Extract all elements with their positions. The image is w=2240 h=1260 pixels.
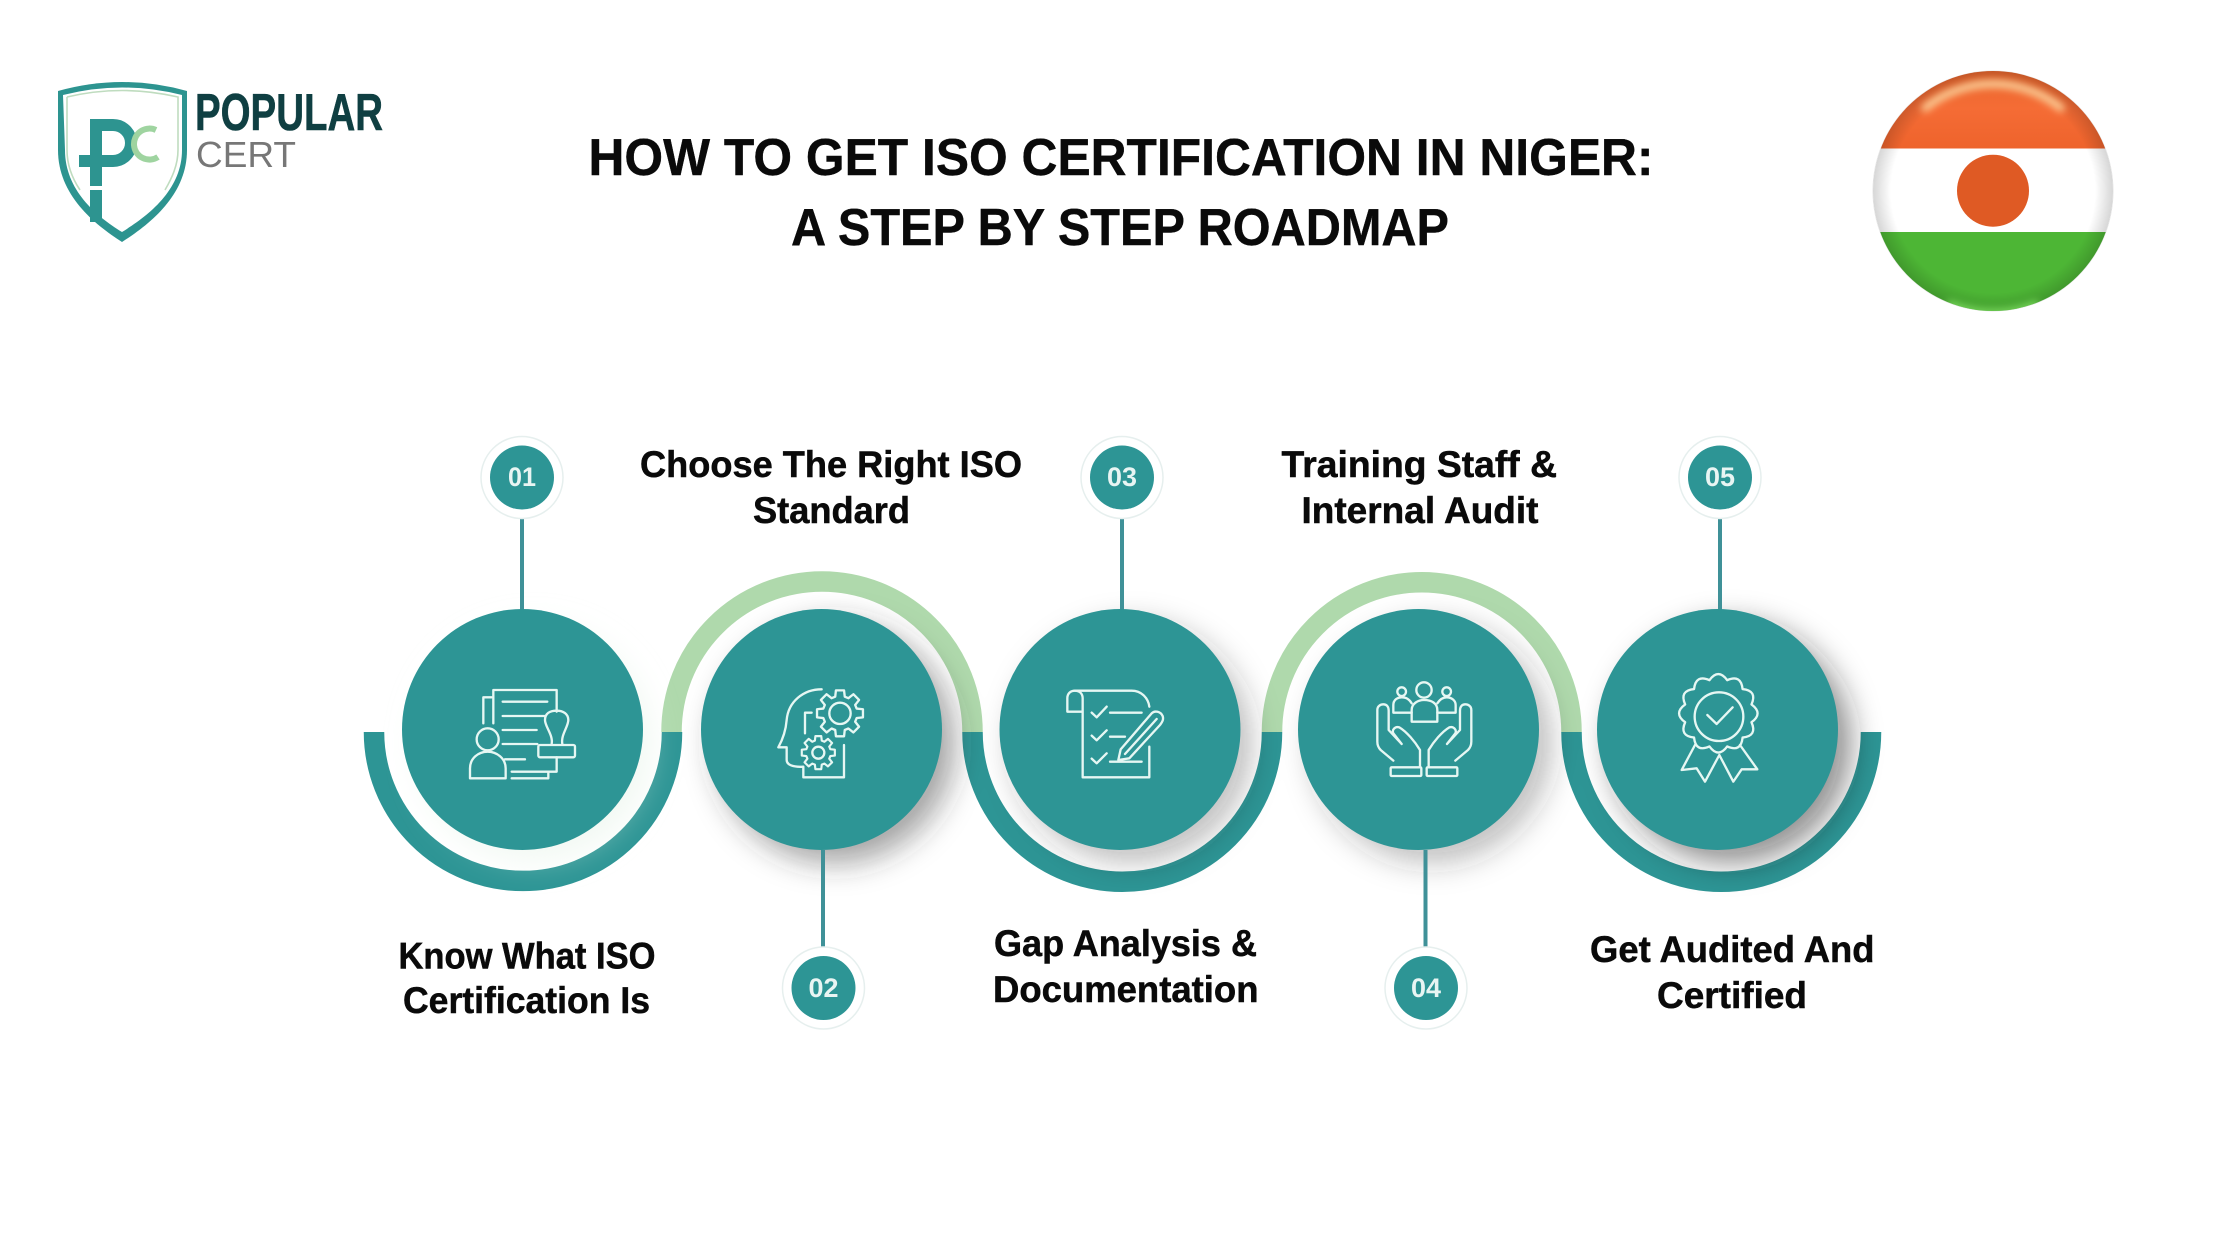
badge 05 (1679, 436, 1761, 518)
label: step 1: Certification Is (403, 980, 650, 1021)
label: step 3: Documentation (993, 969, 1258, 1010)
icon: award rosette (1679, 674, 1758, 782)
label: step 2 (640, 444, 1022, 531)
step 3 circle (1000, 609, 1240, 850)
label: step 2: Standard (753, 490, 910, 531)
label: step 5: Get Audited And (1590, 929, 1874, 970)
step 1 circle (402, 609, 643, 850)
icon: Niger flag badge (1870, 68, 2116, 314)
label: step 2: Choose The Right ISO (640, 444, 1022, 485)
step 4 circle (1298, 609, 1539, 850)
circle shadows (416, 623, 1851, 863)
arc: step 2 (672, 582, 972, 732)
label: step 5 (1590, 929, 1874, 1016)
icon: checklist and pencil (1067, 691, 1163, 777)
label: step 3: Gap Analysis & (994, 923, 1257, 964)
title: HOW TO GET ISO CERTIFICATION IN NIGER: (588, 129, 1654, 187)
logo wordmark: POPULAR (195, 84, 383, 142)
badge 01: 01 (508, 462, 536, 492)
arc: step 4 (1272, 582, 1572, 732)
label: step 4: Internal Audit (1302, 490, 1538, 531)
label: step 1 (398, 936, 656, 1021)
logo wordmark: CERT (196, 134, 296, 175)
title: A STEP BY STEP ROADMAP (791, 199, 1449, 257)
arc: step 3 (972, 732, 1272, 882)
logo: Popular Cert (58, 82, 383, 242)
title (588, 129, 1654, 257)
connector lines (522, 519, 1720, 948)
badge 04 (1385, 947, 1467, 1029)
roadmap (374, 436, 1874, 1029)
icon: head with gears (778, 689, 863, 777)
badge 02 (782, 947, 864, 1029)
arc: step 1 (374, 732, 672, 881)
step 5 circle (1597, 609, 1838, 850)
icon: hands holding team (1377, 682, 1471, 776)
icon: documents, person and stamp (470, 690, 575, 778)
badge 02: 02 (808, 973, 838, 1003)
label: step 1: Know What ISO (398, 936, 656, 976)
step 2 circle (701, 609, 942, 850)
badge 05: 05 (1705, 462, 1735, 492)
logo wordmark (195, 84, 383, 175)
label: step 3 (993, 923, 1258, 1010)
badge 03: 03 (1107, 462, 1137, 492)
label: step 4 (1282, 444, 1557, 531)
label: step 5: Certified (1657, 975, 1807, 1016)
arc: step 5 (1572, 732, 1871, 882)
label: step 4: Training Staff & (1282, 444, 1557, 485)
badge 03 (1081, 436, 1163, 518)
badge 01 (481, 436, 563, 518)
badge 04: 04 (1411, 973, 1441, 1003)
logo shield (58, 82, 187, 242)
